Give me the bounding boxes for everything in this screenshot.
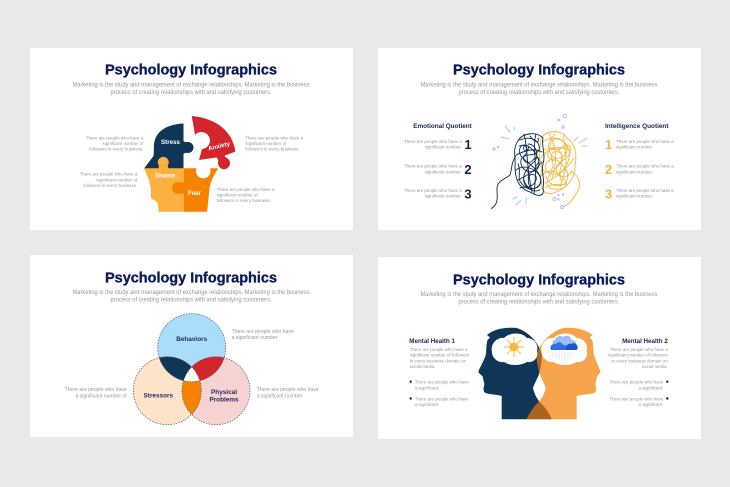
puzzle piece: fear (172, 168, 218, 212)
list: emotional items: significant number. (425, 194, 462, 199)
head: orange profile (527, 328, 600, 419)
list: emotional items: There are people who have a (404, 164, 462, 169)
subtitle (420, 82, 658, 96)
title: Psychology Infographics (453, 62, 625, 78)
list: intelligence items (605, 137, 674, 201)
subtitle: Marketing is the study and management of exchange relationships. Marketing is the business (420, 82, 658, 88)
subtitle: Marketing is the study and management of exchange relationships. Marketing is the business (72, 290, 310, 296)
text: left description: social media. (410, 364, 436, 369)
list: emotional items: There are people who have a (404, 188, 462, 193)
text: left description: There are people who have a (410, 347, 468, 352)
list: right bullets (609, 380, 668, 407)
list: left bullets: There are people who have (415, 380, 469, 385)
text: anxiety note: There are people who have a (245, 135, 304, 140)
illustration: yellow scribble brain (539, 132, 579, 207)
subtitle: Marketing is the study and management of exchange relationships. Marketing is the business (420, 292, 658, 298)
list: intelligence items: There are people who have a (616, 164, 674, 169)
text: shame note (80, 172, 138, 188)
list: right bullets: a significant. (639, 402, 663, 407)
title: Psychology Infographics (105, 270, 277, 286)
subtitle (72, 290, 310, 304)
text: stress note (86, 135, 144, 152)
panel: venn diagram (30, 255, 353, 437)
illustration: navy scribble brain (492, 134, 544, 208)
text: physical problems note (257, 387, 319, 400)
text: right description (608, 347, 669, 369)
illustration: blue spark marks (493, 114, 587, 208)
puzzle piece: stress (144, 124, 194, 168)
list: intelligence items: There are people who have a (616, 188, 674, 193)
list: emotional items: There are people who have a (404, 139, 462, 144)
text: fear note: followers in every business. (217, 198, 271, 203)
puzzle piece: stress: Stress (161, 139, 181, 146)
subtitle: process of creating relationships with and satisfying customers. (458, 90, 620, 96)
thought cloud: sunny (492, 334, 537, 365)
label: physical problems: Physical (211, 389, 237, 396)
text: fear note: significant number of (217, 193, 258, 198)
list: emotional items (404, 137, 472, 201)
title: Psychology Infographics (105, 62, 277, 78)
head: navy profile (478, 328, 552, 419)
list: intelligence items: 2 (605, 162, 612, 177)
text: left description (410, 347, 470, 369)
icon: rain cloud (550, 336, 578, 360)
text: right description: significant number of followers (608, 353, 669, 358)
thought cloud: rainy (541, 334, 587, 365)
label: physical problems: Problems (209, 397, 239, 404)
text: fear note: There are people who have a (217, 187, 275, 192)
text: left description: significant number of followers (410, 353, 470, 358)
heading: mental health 1: Mental Health 1 (409, 338, 456, 345)
list: emotional items: 2 (464, 162, 472, 177)
subtitle (420, 292, 658, 306)
text: anxiety note: followers in every business. (245, 147, 300, 152)
text: shame note: significant number of (96, 177, 138, 182)
text: stress note: significant number of (103, 141, 144, 146)
text: physical problems note: There are people who have (257, 387, 319, 393)
list: intelligence items: significant number. (616, 145, 653, 150)
text: left description: in every business domain on (410, 358, 466, 363)
label: physical problems (209, 389, 239, 404)
panel: two heads (378, 257, 701, 439)
list: intelligence items: significant number. (616, 194, 653, 199)
puzzle piece: shame: Shame (155, 172, 176, 180)
heading: intelligence quotient: Intelligence Quotient (605, 123, 668, 130)
list: right bullets: There are people who have (609, 380, 664, 385)
text: right description: social media. (642, 364, 668, 369)
text: stressors note: There are people who have (65, 387, 127, 393)
puzzle piece: fear: Fear (188, 190, 202, 197)
subtitle: process of creating relationships with and satisfying customers. (458, 300, 620, 306)
list: emotional items: 3 (464, 186, 472, 201)
list: left bullets: a significant. (415, 385, 439, 390)
text: stressors note (65, 387, 127, 400)
list: right bullets: a significant. (639, 385, 663, 390)
subtitle (72, 82, 310, 96)
text: physical problems note: a significant number (257, 394, 303, 400)
icon: sun (504, 337, 524, 357)
list: intelligence items: 1 (605, 137, 612, 152)
text: stressors note: a significant number of (75, 394, 127, 400)
list: left bullets: a significant. (415, 402, 439, 407)
subtitle: process of creating relationships with and satisfying customers. (110, 298, 272, 304)
list: emotional items: 1 (464, 137, 472, 152)
text: shame note: There are people who have a (80, 172, 138, 177)
list: left bullets: There are people who have (415, 396, 469, 401)
text: right description: in every business domain on (612, 358, 668, 363)
text: anxiety note (245, 135, 304, 152)
heading: emotional quotient: Emotional Quotient (413, 123, 472, 130)
list: left bullets (410, 380, 469, 407)
list: emotional items: significant number. (425, 169, 462, 174)
subtitle: process of creating relationships with and satisfying customers. (110, 90, 272, 96)
list: right bullets: There are people who have (609, 396, 664, 401)
text: stress note: followers in every business. (89, 147, 144, 152)
text: right description: There are people who have a (610, 347, 668, 352)
puzzle piece: shame (144, 157, 184, 212)
title: Psychology Infographics (453, 272, 625, 288)
heading: mental health 2: Mental Health 2 (622, 338, 668, 345)
text: behaviors note (232, 329, 294, 341)
puzzle piece: anxiety (192, 116, 236, 169)
list: intelligence items: 3 (605, 186, 612, 201)
panel: tangled brain (378, 48, 701, 230)
text: behaviors note: a significant number (232, 335, 278, 341)
text: fear note (217, 187, 275, 203)
list: emotional items: significant number. (425, 145, 462, 150)
list: intelligence items: There are people who have a (616, 139, 674, 144)
text: behaviors note: There are people who have (232, 329, 294, 335)
text: stress note: There are people who have a (86, 135, 144, 140)
overlap: brown neck and skull (526, 348, 552, 420)
subtitle: Marketing is the study and management of exchange relationships. Marketing is the business (72, 82, 310, 88)
puzzle piece: anxiety: Anxiety (207, 140, 231, 153)
panel: puzzle head (30, 48, 353, 230)
list: intelligence items: significant number. (616, 169, 653, 174)
venn circles (133, 314, 250, 425)
label: stressors: Stressors (144, 392, 173, 399)
label: behaviors: Behaviors (176, 336, 208, 343)
text: shame note: followers in every business. (83, 183, 137, 188)
text: anxiety note: significant number of (245, 141, 287, 146)
